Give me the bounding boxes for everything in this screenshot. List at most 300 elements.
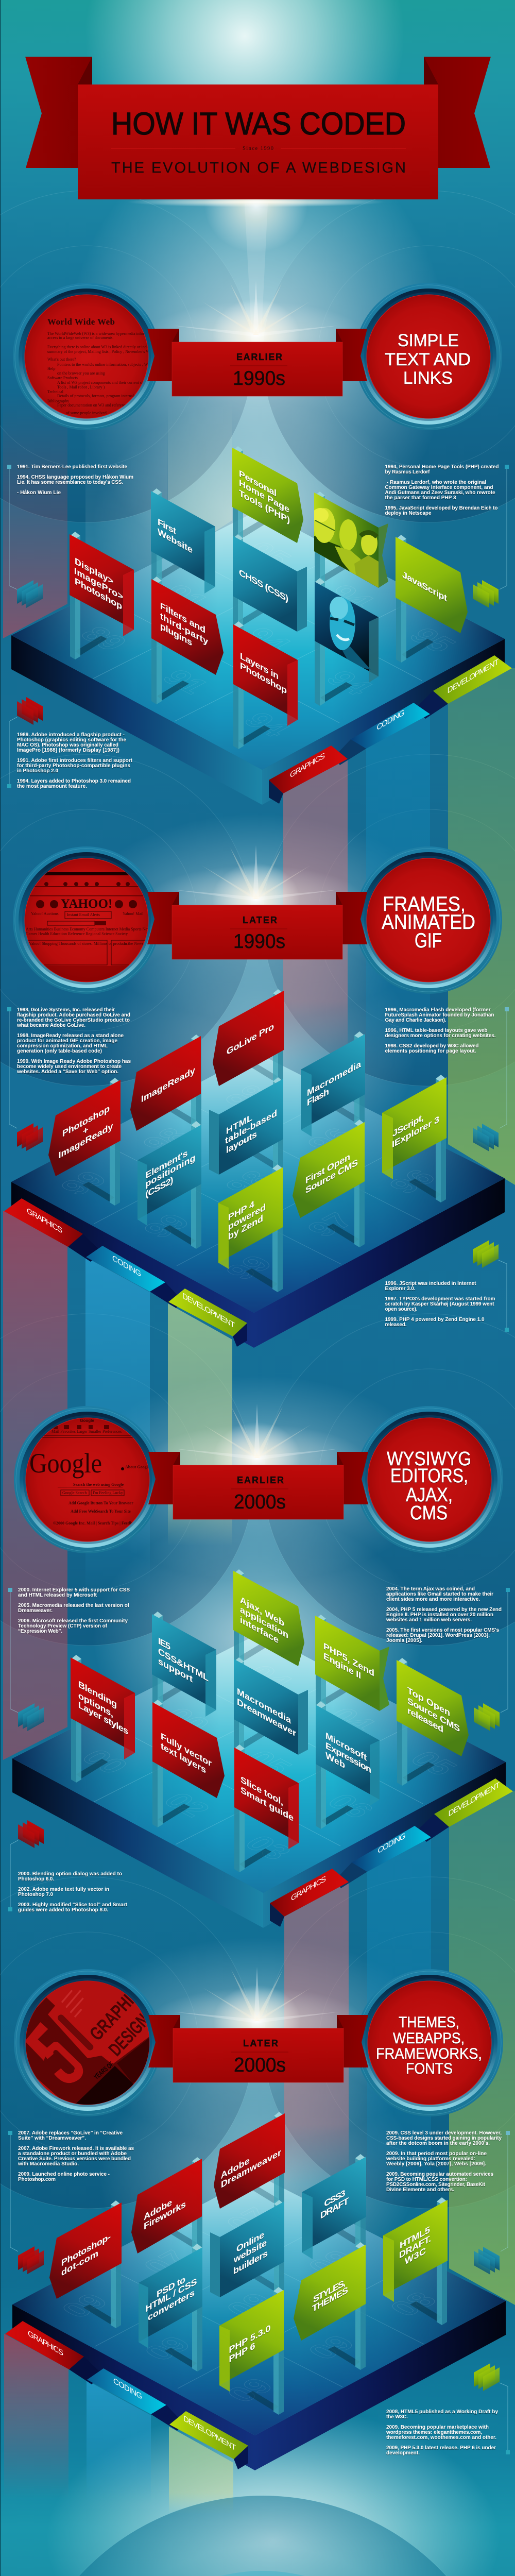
left screenshot circle: Search the web using Google (73, 1482, 124, 1487)
section 2: note, graphics top-left: flagship product. Adobe purchased GoLive and (17, 1012, 130, 1018)
right topic circle: LINKS (403, 368, 453, 388)
section 3: note, graphics bottom-left: 2003. Highly modified “Slice tool” and Smart (18, 1902, 128, 1908)
section 2: note, coding top-right (385, 1007, 496, 1054)
flag: Adobe Fireworks: Fireworks (144, 2199, 186, 2232)
flag: Photoshop + ImageReady: ImageReady (59, 1121, 113, 1161)
section 2: note, development bottom-right: released. (385, 1322, 407, 1328)
right topic circle: AJAX, (406, 1484, 453, 1506)
section 3: earlier 2000s header (14, 1406, 503, 1553)
flag: First Open Source CMS: Source CMS (305, 1157, 358, 1196)
left screenshot circle (14, 1406, 161, 1553)
left screenshot circle: Arts Humanities Business Economy Computers Internet Media Sports News (26, 927, 152, 931)
flag: STYLES, THEMES (294, 2245, 366, 2341)
flag: ImageReady: ImageReady (141, 1065, 195, 1105)
tab: graphics: GRAPHICS (290, 751, 325, 780)
left screenshot circle: YAHOO! (61, 897, 112, 911)
left screenshot circle: ©2000 Google Inc. Mail | Search Tips | Feedback | Jobs@Goo (53, 1521, 161, 1526)
flag: Macromedia Flash (301, 1034, 365, 1137)
flag: Display ImagePro Photoshop: Photoshop (75, 576, 122, 612)
flag: First Open Source CMS: First Open (305, 1151, 350, 1187)
section 2: platform: 98 (217, 1166, 280, 1199)
tab: development (434, 1778, 513, 1827)
flag: Microsoft Expression Web (316, 1705, 380, 1806)
section 1: note, development top-right: by Rasmus Lerdorf (385, 469, 430, 475)
section 1: platform: 94 (319, 581, 382, 613)
flag: Macromedia Flash: Flash (307, 1086, 329, 1109)
flag: Personal Home Page Tools (232, 448, 303, 543)
section 4: note, development bottom-right: wordpress themes: elegantthemes.com, (386, 2430, 482, 2435)
flag: CHSS (CSS): CHSS (CSS) (239, 567, 288, 604)
section 4: platform: 09 (300, 2331, 363, 2364)
section 4: note, development bottom-right: 2009, PHP 5.3.0 latest release. PHP 6 is under (386, 2445, 496, 2451)
flag: PSD to HTML / CSS converters: PSD to (157, 2274, 185, 2300)
section 3: note, development top-right: client sides more and more interactive. (386, 1597, 480, 1602)
flag: Photoshop-dot-com (49, 2202, 122, 2299)
section 3: note, graphics bottom-left: Photoshop 6.0. (18, 1876, 54, 1882)
tab: graphics (269, 745, 348, 793)
section 1: platform: 94 (236, 623, 299, 656)
tab: graphics: GRAPHICS (27, 1206, 62, 1235)
flag: Filters and third-party plugins: plugins (160, 621, 192, 649)
section 4: note, graphics top-left: with Macromedia Studio. (18, 2161, 79, 2167)
left book cover circle (14, 1969, 161, 2116)
right topic circle: CMS (410, 1502, 448, 1524)
section 3: note, graphics bottom-left (18, 1871, 128, 1913)
section 3: note, development top-right: 2004. The term Ajax was coined, and (386, 1586, 475, 1592)
section 4: note, graphics top-left: 2009. Launched online photo service - (18, 2172, 110, 2177)
flag: Element's positioning (CSS2): Element's (145, 1148, 187, 1181)
tab: development (168, 1289, 247, 1336)
section 4: platform: 09 (54, 2290, 116, 2322)
flag: Layers in Photoshop (233, 624, 298, 726)
section 1: note, development top-right: 1994, Personal Home Page Tools (PHP) created (385, 464, 499, 470)
section 4: platform: 09 (136, 2332, 199, 2365)
left screenshot circle: In the News (124, 941, 144, 946)
book title: GRAPHIC (85, 1983, 145, 2044)
flag: Top Open Source CMS released (397, 1660, 469, 1756)
tab: coding (86, 1246, 165, 1292)
section 2: note, graphics top-left: product for animated GIF creation, image (17, 1038, 117, 1044)
section 3: note, development top-right: applications like Gmail started to make their (386, 1591, 493, 1597)
section 3: note, development top-right: websites and 1 million web servers. (386, 1617, 472, 1623)
flag: PHP5, Zend Engine II: PHP5, Zend (323, 1641, 374, 1679)
section 4: category tabs (5, 2321, 248, 2459)
left screenshot circle: Yahoo! Mail (123, 911, 144, 916)
tab: coding: CODING (377, 708, 405, 733)
section 4: note, development bottom-right: development. (386, 2450, 420, 2456)
left screenshot circle: Bibliography (47, 399, 69, 403)
right topic circle: FRAMEWORKS, (376, 2045, 482, 2062)
left screenshot circle: Google (80, 1418, 94, 1423)
flag: Filters and third-party plugins: third-party (160, 611, 208, 648)
flag: First Open Source CMS (293, 1122, 365, 1218)
flag: IE5 CSS&HTML support: IE5 (158, 1636, 170, 1653)
right topic circle: WEBAPPS, (393, 2030, 465, 2047)
flag: Display ImagePro Photoshop (70, 534, 134, 636)
flag: Blending options, Layer styles: options, (78, 1690, 113, 1720)
flag: JavaScript: JavaScript (402, 569, 448, 604)
flag: PHP 5.3.0 PHP 6: PHP 6 (229, 2341, 255, 2365)
right topic circle (356, 1969, 503, 2116)
flag: CHSS (CSS) (233, 536, 307, 632)
flag: HTML5 DRAFT. W3C: HTML5 (400, 2225, 430, 2251)
flag: Macromedia Flash: Macromedia (307, 1059, 361, 1099)
tab: graphics (4, 1198, 83, 1247)
section 4: note, coding top-right: Weebly [2006], Yola [2007], Webs [2009]. (386, 2161, 486, 2167)
section 2: platform: 99 (53, 1167, 115, 1199)
period ribbon: 2000s (234, 2054, 286, 2076)
right topic circle: WYSIWYG (387, 1448, 471, 1470)
flag: Element's positioning (CSS2): positioning (145, 1153, 195, 1190)
right topic circle: EDITORS, (390, 1465, 468, 1487)
section 1: platform: 91 (154, 666, 217, 698)
right topic circle (355, 283, 502, 430)
section 2: note, coding top-right: 1998. CSS2 developed by W3C allowed (385, 1043, 479, 1049)
flag: Adobe Dreamweaver: Dreamweaver (221, 2147, 281, 2191)
flag: Personal Home Page Tools: Home Page (239, 478, 289, 516)
section 4: note, graphics top-left: Photoshop.com (18, 2177, 56, 2182)
section 4: platform: 09 (218, 2289, 281, 2321)
section 3: category tabs (270, 1778, 513, 1917)
flag: Element's positioning (CSS2): (CSS2) (145, 1175, 173, 1200)
flag: PSD to HTML / CSS converters: converters (148, 2287, 195, 2324)
flag: IE5 CSS&HTML support: support (158, 1656, 193, 1685)
flag: HTML5 DRAFT. W3C (383, 2200, 448, 2302)
flag: Display ImagePro Photoshop: ImagePro> (74, 566, 123, 603)
flag: PHP 4 powered by Zend: by Zend (228, 1213, 263, 1243)
section 3: note, coding top-left: Technology Preview (CTP) version of (18, 1623, 108, 1629)
section 2: note, development bottom-right: 1997. TYPO3's development was started from (385, 1296, 495, 1302)
section 2: category tabs (4, 1198, 247, 1336)
flag: PHP 5.3.0 PHP 6: PHP 5.3.0 (229, 2323, 270, 2356)
section 2: flags (48, 991, 447, 1269)
flag: Adobe Dreamweaver: Adobe (221, 2156, 250, 2181)
tab: coding: CODING (112, 1253, 141, 1279)
section 3: note, coding top-left: “Expression Web”. (18, 1629, 62, 1634)
section 3: note, coding top-left: 2006. Microsoft released the first Community (18, 1618, 128, 1624)
section 1: note, graphics bottom-left: MAC OS). Photoshop was originally called (17, 742, 118, 748)
flag: HTML table-based layouts: table-based (225, 1108, 277, 1147)
section 2: platform: 98 (134, 1124, 197, 1156)
flag: HTML table-based layouts: layouts (226, 1129, 257, 1156)
light bursts (127, 160, 385, 2057)
flag: Photoshop + ImageReady: Photoshop (62, 1103, 110, 1140)
section 1: note, graphics bottom-left: 1989. Adobe introduced a flagship product - (17, 732, 125, 738)
section 2: note, coding top-right: 1996, Macromedia Flash developed (former (385, 1007, 491, 1013)
left screenshot circle: Instant Email Alerts (67, 912, 100, 917)
flag: photo of Hakon Wium Lie (315, 582, 379, 683)
flag: Ajax, Web application interface: Ajax, Web (240, 1595, 284, 1629)
flag: IE5 CSS&HTML support: CSS&HTML (158, 1646, 209, 1684)
section 4: platform (12, 2175, 506, 2470)
flag: Photoshop-dot-com: Photoshop- (61, 2231, 111, 2269)
section 3: note, development top-right (386, 1586, 502, 1643)
section 1: platform (11, 510, 505, 805)
period ribbon: LATER (243, 2038, 278, 2048)
section 2: note, graphics top-left: generation (only table-based code) (17, 1048, 102, 1054)
flag: HTML table-based layouts (209, 1079, 283, 1175)
section 2: note, development bottom-right (385, 1281, 495, 1328)
section 4: note, coding top-right: website building platforms revealed: (386, 2156, 475, 2162)
section 1: flags (70, 448, 468, 726)
section 2: later 1990s header (13, 846, 502, 994)
left screenshot circle: Everything there is online about W3 is linked directly or indirectly to this document (47, 345, 186, 349)
right topic circle: ANIMATED (382, 911, 475, 934)
section 2: note, graphics top-left: compression optimization, and HTML (17, 1043, 108, 1049)
left screenshot circle: Add Free WebSearch To Your Site (71, 1509, 131, 1514)
period ribbon: EARLIER (236, 352, 282, 362)
section 1: note, development top-right: the parser that formed PHP 3 (385, 495, 456, 501)
section 4: note, coding top-right: for PSD to HTML/CSS convertion: (386, 2177, 467, 2182)
flag: PSD to HTML / CSS converters: HTML / CSS (145, 2276, 197, 2315)
section 3: platform: 05 (402, 1747, 465, 1780)
section 3: note, graphics bottom-left: 2000. Blending option dialog was added to (18, 1871, 122, 1877)
flag: Blending options, Layer styles: Layer styles (78, 1700, 128, 1737)
section 3: note, coding top-left: 2000. Internet Explorer 5 with support for CSS (18, 1587, 130, 1593)
tab: development: DEVELOPMENT (183, 2414, 236, 2453)
left screenshot circle: Technical (47, 389, 64, 394)
flag: STYLES, THEMES: THEMES (312, 2285, 348, 2315)
section 2: platform (11, 1053, 505, 1348)
flag: Photoshop + ImageReady (48, 1080, 121, 1176)
flag: Macromedia Dreamweaver (234, 1659, 308, 1755)
flag: First Website: First (158, 517, 177, 537)
section 2: note, development bottom-right: 1996. JScript was included in Internet (385, 1281, 476, 1286)
section 4: flags (49, 2113, 448, 2392)
right topic circle: THEMES, (399, 2014, 459, 2031)
right topic circle: FRAMES, (383, 893, 466, 916)
section 4: platform: 07 (135, 2246, 198, 2279)
section 2: platform: 98 (217, 1081, 280, 1113)
section 3: note, development top-right: Joomla [2005]. (386, 1638, 422, 1643)
flag: Adobe Dreamweaver (214, 2113, 285, 2209)
section 4: note, graphics top-left: 2007. Adobe Firework released. It is available as (18, 2146, 134, 2151)
flag: STYLES, THEMES: STYLES, (313, 2277, 346, 2306)
section 4: leader lines and stack icons (8, 2131, 510, 2454)
section 2: note, coding top-right: FutureSplash Animator founded by Jonathan (385, 1012, 494, 1018)
tab: coding (352, 1826, 431, 1872)
flag: Layers in Photoshop: Photoshop (240, 660, 287, 697)
flag: Fully vector text layers: Fully vector (161, 1731, 212, 1769)
left screenshot circle: summary of the project, Mailing lists , Policy , November's W3 news (47, 349, 161, 354)
section 3: platform: 03 (236, 1832, 299, 1864)
flag: First Website: Website (158, 527, 193, 556)
tab: development: DEVELOPMENT (448, 657, 499, 696)
flag: Filters and third-party plugins (151, 579, 224, 675)
section 2: note, development bottom-right: open source). (385, 1307, 418, 1312)
section 2: note, development bottom-right: scratch by Kasper Skårhøj (August 1999 went (385, 1301, 494, 1307)
flag: photo of PHP creators (314, 493, 388, 588)
tab: development (169, 2411, 248, 2459)
section 4: note, coding top-right: after the dotcom boom in the early 2000's. (386, 2141, 490, 2146)
tab: coding: CODING (113, 2376, 142, 2401)
flag: Ajax, Web application interface: application (240, 1604, 288, 1641)
section 1: note, graphics bottom-left: 1994. Layers added to Photoshop 3.0 remained (17, 778, 131, 784)
right topic circle (356, 1406, 503, 1553)
flag: Online website builders: Online (236, 2229, 264, 2255)
section 4: later 2000s header (14, 1969, 503, 2116)
tab: coding (351, 703, 430, 749)
section 2: note, development bottom-right: 1999. PHP 4 powered by Zend Engine 1.0 (385, 1317, 485, 1323)
period ribbon: 1990s (233, 930, 285, 953)
section 2: note, graphics top-left: 1998. ImageReady released as a stand alone (17, 1033, 124, 1039)
section 2: platform: 99 (135, 1210, 198, 1242)
section 1: note, graphics bottom-left: in Photoshop 2.0 (17, 768, 58, 774)
flag: Personal Home Page Tools: Tools (PHP) (239, 488, 290, 526)
flag: Element's positioning (CSS2) (138, 1125, 201, 1226)
section 1: note, coding top-left: - Håkon Wium Lie (17, 489, 61, 496)
section 3: platform (12, 1633, 506, 1928)
section 2: platform: 97 (299, 1209, 362, 1241)
flag: Display ImagePro Photoshop: Display> (75, 556, 113, 587)
flag: First Website (151, 491, 215, 594)
left screenshot circle (13, 283, 156, 430)
section 3: platform: 05 (237, 1747, 300, 1779)
section 1: platform: 94 (318, 667, 381, 699)
section 3: note, graphics bottom-left: guides were added to Photoshop 8.0. (18, 1907, 108, 1913)
section 1: note, graphics bottom-left: 1991. Adobe first introduces filters and support (17, 758, 133, 764)
tab: development: DEVELOPMENT (449, 1780, 500, 1819)
section 4: note, coding top-right: CSS-based designs started gaining in popularity (386, 2136, 502, 2141)
section 3: platform: 04 (237, 1661, 300, 1693)
tab: graphics (5, 2321, 84, 2369)
tab: graphics (270, 1869, 349, 1917)
section 4: note, coding top-right: 2009. Becoming popular automated services (386, 2172, 493, 2177)
section 2: note, graphics top-left: what became Adobe GoLive. (16, 1023, 85, 1028)
section 1: platform: 95 (236, 538, 299, 570)
tab: development (433, 655, 512, 704)
left screenshot circle: A list of W3 project components and their current state. (57, 380, 149, 385)
flag: Filters and third-party plugins: Filters and (160, 601, 205, 636)
flag: Blending options, Layer styles: Blending (78, 1679, 117, 1710)
period ribbon (148, 2015, 368, 2082)
section 3: leader lines and stack icons (8, 1588, 510, 1911)
flag: GoLive Pro: GoLive Pro (227, 1021, 274, 1058)
flag: Slice tool, Smart guide (234, 1748, 299, 1849)
right topic circle: SIMPLE (398, 331, 459, 350)
section 4: platform: 08 (382, 2288, 445, 2320)
left screenshot circle: Games Health Education Reference Regional Science Society (26, 931, 128, 936)
section 3: note, development top-right: released: Drupal [2001]. WordPress [2003]. (386, 1633, 490, 1638)
flag: Photoshop + ImageReady: + (83, 1124, 89, 1138)
section 1: note, graphics bottom-left (17, 732, 133, 789)
left screenshot circle: The WorldWideWeb (W3) is a wide-area hypermedia information retrieval initiative (47, 331, 186, 336)
period ribbon: 2000s (234, 1491, 286, 1513)
section 4: note, graphics top-left: 2007. Adobe replaces “GoLive” in “Creative (18, 2130, 123, 2136)
section 1: note, graphics bottom-left: ImagePro [1988] (formerly Display [1987]) (17, 748, 119, 753)
flag: Online website builders: website (233, 2238, 267, 2266)
left screenshot circle: Details of protocols, formats, program internals etc (57, 394, 142, 398)
flag: Macromedia Dreamweaver: Dreamweaver (237, 1697, 296, 1739)
section 1: platform: 91 (154, 581, 217, 613)
flag: Ajax, Web application interface (233, 1571, 304, 1666)
section 1: platform: 89 (72, 622, 135, 655)
section 3: note, development top-right: 2004, PHP 5 released powered by the new Zend (386, 1607, 502, 1613)
flag: Ajax, Web application interface: interface (240, 1615, 279, 1646)
flag: Online website builders: builders (233, 2248, 268, 2277)
left book cover circle: DESIGN (105, 2010, 153, 2060)
tab: coding: CODING (378, 1831, 406, 1856)
flag: Macromedia Dreamweaver: Macromedia (237, 1686, 291, 1726)
flag: Fully vector text layers (152, 1702, 225, 1798)
flag: Photoshop-dot-com: dot-com (61, 2248, 98, 2279)
flag: PHP 4 powered by Zend (218, 1167, 283, 1269)
section 1: note, graphics bottom-left: for third-party Photoshop-compartible plugins (17, 763, 130, 769)
flag: Microsoft Expression Web: Web (325, 1750, 345, 1771)
section 1: note, development top-right: Andi Gutmans and Zeev Suraski, who rewrote (385, 490, 495, 496)
section 2: note, coding top-right: 1996, HTML table-based layouts gave web (385, 1028, 487, 1033)
section 3: note, coding top-left (18, 1587, 130, 1634)
section 2: note, development bottom-right: Explorer 3.0. (385, 1286, 416, 1292)
section 3: note, development top-right: Engine II. PHP is installed on over 20 million (386, 1612, 493, 1618)
section 4: platform: 09 (300, 2246, 363, 2279)
left screenshot circle: Paper documentation on W3 and references. (57, 403, 130, 408)
section 1: note, coding top-left (17, 464, 133, 496)
period ribbon (147, 892, 367, 959)
flag: JScript, IExplorer 3: JScript, (392, 1112, 424, 1140)
section 1: note, development top-right: - Rasmus Lerdorf, who wrote the original (387, 480, 486, 485)
since 1990: Since 1990 (243, 146, 273, 151)
section 3: note, coding top-left: and HTML released by Microsoft (18, 1592, 97, 1598)
flag: CSS3 DRAFT: CSS3 (324, 2188, 346, 2210)
flag: PHP5, Zend Engine II: Engine II (323, 1651, 361, 1682)
tab: development: DEVELOPMENT (182, 1291, 235, 1330)
section 3: platform: 04 (320, 1704, 383, 1736)
section 4: note, development bottom-right: themeforest.com, woothemes.com and other. (386, 2435, 496, 2441)
section 2: note, graphics top-left: become widely used environment to create (17, 1064, 122, 1070)
section 2: note, coding top-right: designers more options for creating websites. (385, 1033, 496, 1039)
section 4: note, coding top-right: 2009. CSS level 3 under development. However, (386, 2130, 502, 2136)
left screenshot circle: Software Products (47, 376, 78, 380)
flag: HTML table-based layouts: HTML (226, 1112, 252, 1137)
section 1: note, coding top-left: Lie. It has some resemblance to today's CSS. (17, 480, 123, 485)
section 4: note, development bottom-right: 2009. Becoming popular marketplace with (386, 2425, 489, 2430)
section 1: leader lines and stack icons (7, 465, 509, 788)
left screenshot circle: on the browser you are using (57, 371, 105, 376)
flag: Adobe Fireworks: Adobe (144, 2197, 172, 2223)
left book cover circle: YEARS OF (92, 2060, 115, 2081)
section 4: note, development bottom-right (386, 2409, 498, 2456)
flag: PHP 4 powered by Zend: PHP 4 (228, 1199, 254, 1224)
left screenshot circle: I'm Feeling Lucky (93, 1490, 123, 1495)
section 4: note, coding top-right: Divine Elemente and others. (386, 2187, 454, 2193)
flag: PHP 4 powered by Zend: powered (228, 1202, 266, 1233)
left screenshot circle: Yahoo! Auctions (31, 911, 59, 916)
left screenshot circle: World Wide Web (47, 317, 115, 327)
flag: GoLive Pro (213, 991, 284, 1086)
flag: CSS3 DRAFT: DRAFT (320, 2196, 349, 2222)
section 4: note, graphics top-left: Creative Suite. Previous versions were bundled (18, 2156, 131, 2162)
section 3: note, graphics bottom-left: Photoshop 7.0 (18, 1892, 53, 1897)
flag: Microsoft Expression Web: Expression (325, 1740, 371, 1776)
period ribbon (148, 1452, 368, 1519)
tab: graphics: GRAPHICS (28, 2329, 63, 2358)
section 3: platform: 06 (319, 1790, 382, 1822)
section 1: platform: 95 (401, 624, 464, 656)
section 1: category tabs (269, 655, 512, 793)
left screenshot circle: Mail Favorites Larger Smaller Preferences (52, 1429, 122, 1434)
flag: PSD to HTML / CSS converters (139, 2247, 202, 2348)
section 1: platform: 94 (235, 708, 298, 741)
section 4: note, graphics top-left: Suite” with “Dreamweaver”. (18, 2136, 86, 2141)
flag: Top Open Source CMS released: Source CMS (407, 1696, 460, 1735)
section 1: note, development top-right (385, 464, 499, 516)
section 1: note, development top-right: 1995, JavaScript developed by Brendan Eich to (385, 505, 497, 511)
section 4: flag poles (83, 2112, 447, 2415)
left screenshot circle: About Google (125, 1465, 150, 1469)
tab: graphics: GRAPHICS (291, 1874, 326, 1903)
section 4: note, graphics top-left (18, 2130, 134, 2182)
